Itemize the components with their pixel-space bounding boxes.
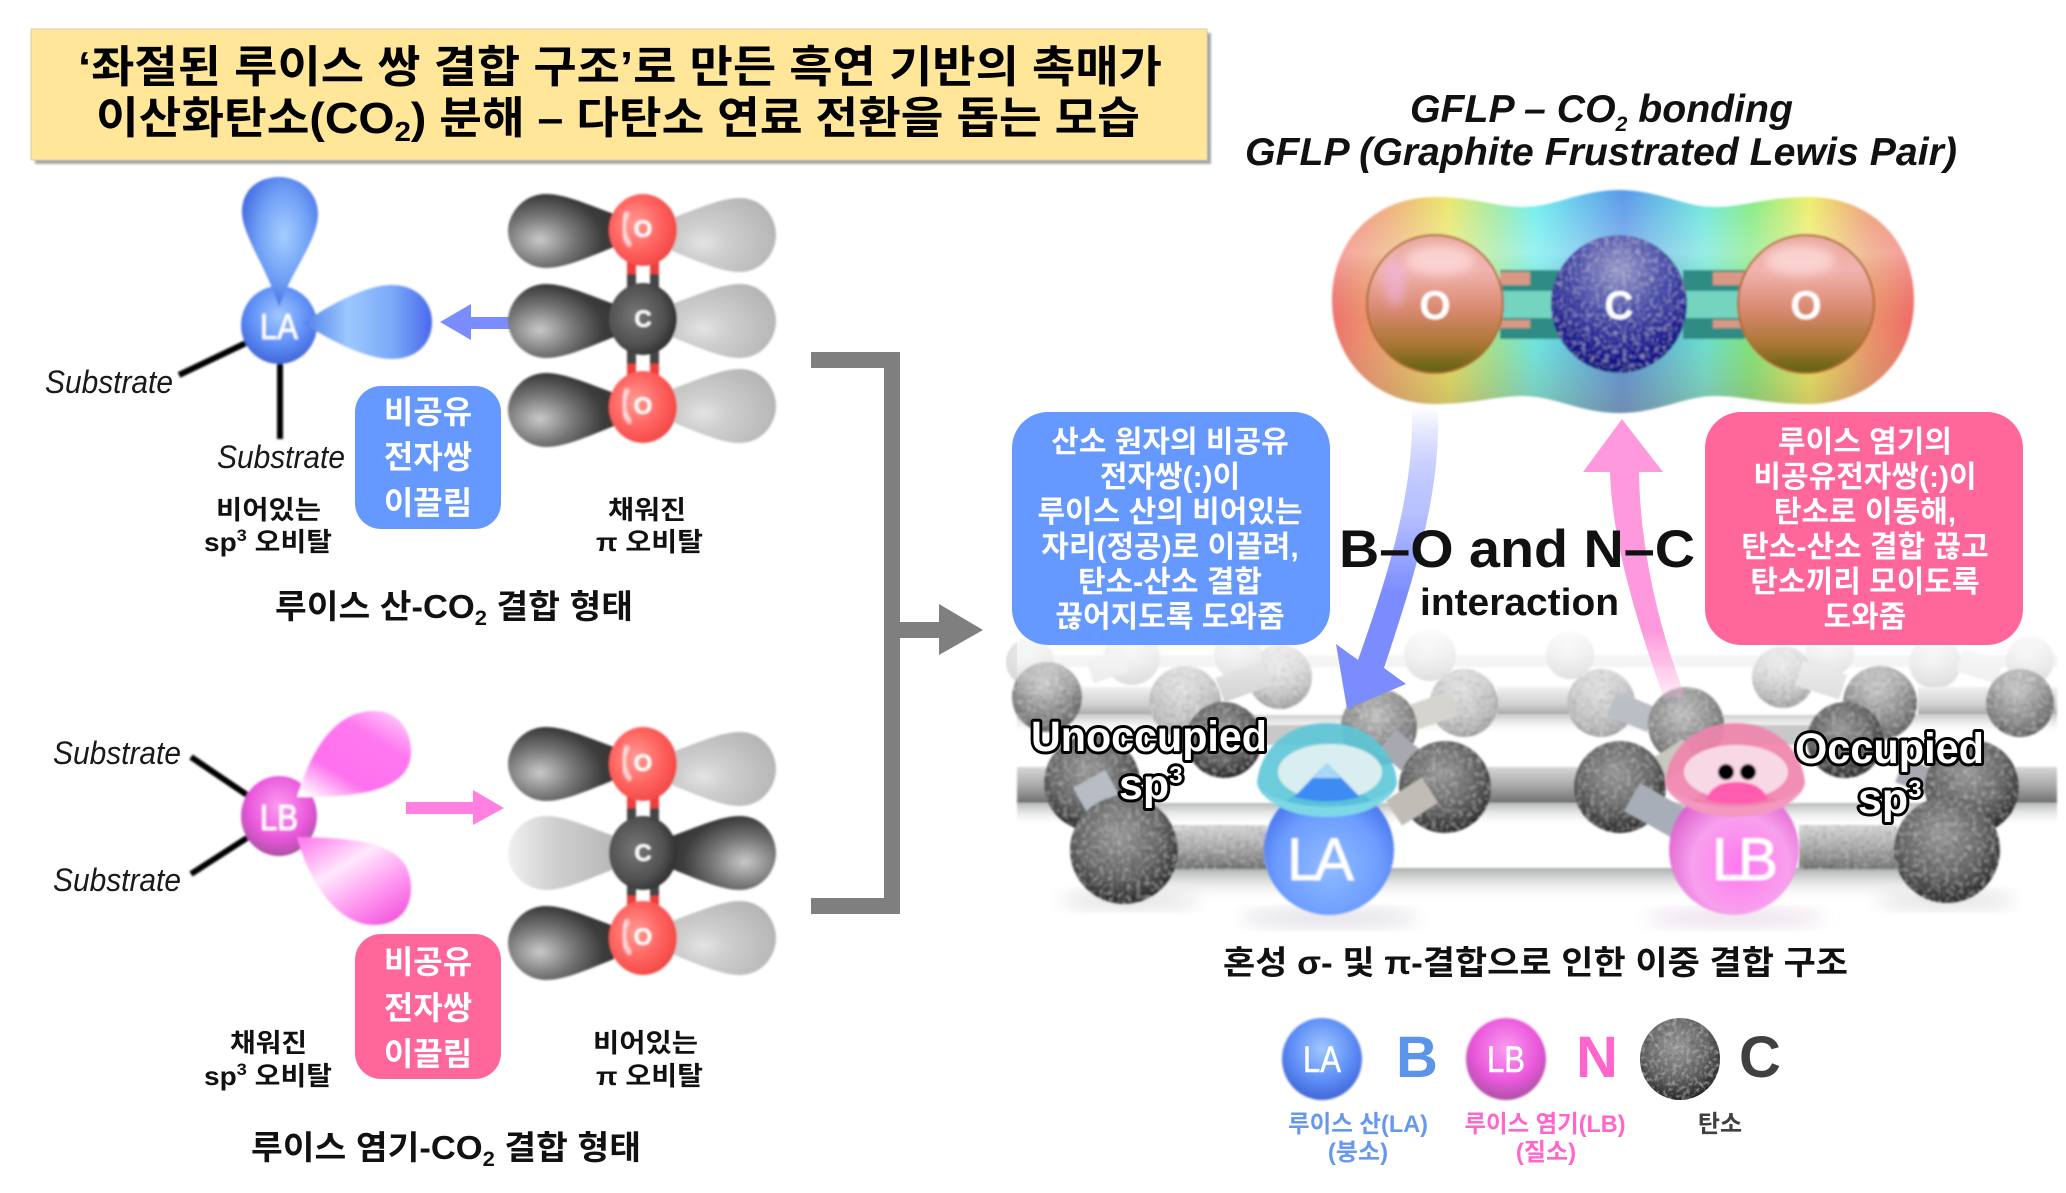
substrate label: Substrate — [45, 364, 173, 400]
arrow: N-C interaction — [1583, 419, 1686, 698]
rainbow surface — [1332, 190, 1914, 413]
double bonds — [627, 258, 659, 380]
atoms: O — [634, 216, 652, 243]
legend — [1282, 1018, 1781, 1166]
legend: boron: 루이스 산(LA) — [1288, 1111, 1428, 1138]
callout: oxygen lone pair (blue): 산소 원자의 비공유 — [1051, 426, 1289, 459]
LA label: LA — [260, 306, 298, 347]
arrow: B-O interaction — [1336, 410, 1438, 709]
legend: boron — [1282, 1018, 1438, 1166]
label: occupied sp3 — [1795, 725, 1984, 823]
atoms — [609, 194, 677, 443]
callout: oxygen lone pair (blue) — [1012, 412, 1330, 645]
upper lobe — [297, 711, 411, 797]
arrow: electron pair attraction to LA — [440, 304, 538, 340]
LB label: LB — [260, 797, 298, 838]
label: filled pi orbital: π 오비탈 — [596, 527, 703, 557]
label: empty sp3 orbital: sp — [204, 527, 234, 557]
callout: oxygen lone pair (blue): 루이스 산의 비어있는 — [1037, 496, 1303, 529]
heading: Lewis base-CO2 binding: 2 — [483, 1148, 495, 1171]
callout: Lewis base lone pair (pink): 탄소로 이동해, — [1774, 496, 1956, 529]
legend: boron: (붕소) — [1328, 1139, 1388, 1166]
substrate label: Substrate — [53, 862, 181, 898]
heading: Lewis acid-CO2 binding: 루이스 산-CO — [275, 588, 466, 625]
graphene lattice illustration — [1006, 625, 2057, 926]
callout: oxygen lone pair (blue): 전자쌍(:)이 — [1100, 461, 1240, 494]
callout: Lewis base lone pair (pink): 도와줌 — [1824, 601, 1906, 634]
label: empty sp3 orbital: 비어있는 — [216, 495, 321, 525]
title banner: ) 분해 – 다탄소 연료 전환을 돕는 모습 — [411, 94, 1140, 143]
label: empty sp3 orbital: 3 — [237, 526, 247, 545]
atoms: O — [634, 750, 652, 777]
label: empty sp3 orbital — [204, 495, 332, 557]
title banner: 이산화탄소(CO — [96, 94, 379, 143]
label: filled sp3 orbital: 오비탈 — [247, 1061, 332, 1091]
callout: oxygen lone pair (blue): 자리(정공)로 이끌려, — [1041, 531, 1299, 564]
callout: Lewis base lone pair (pink): 탄소-산소 결합 끊고 — [1741, 531, 1989, 564]
electron pair — [1718, 764, 1756, 780]
pill: lone-pair attraction (pink): 전자쌍 — [384, 990, 472, 1026]
callout: oxygen lone pair (blue): 탄소-산소 결합 — [1078, 566, 1262, 599]
diagram: Lewis base orbital — [191, 711, 411, 925]
dome shell — [1257, 723, 1397, 817]
label: empty sp3 orbital: 오비탈 — [247, 527, 332, 557]
label: unoccupied sp3: Unoccupied — [1031, 713, 1267, 761]
callout: Lewis base lone pair (pink): 비공유전자쌍(:)이 — [1753, 461, 1977, 494]
legend: nitrogen: 루이스 염기(LB) — [1464, 1111, 1626, 1138]
fade on the far rows — [1017, 625, 2057, 700]
right lobe — [303, 285, 432, 359]
pill: lone-pair attraction (blue) — [355, 386, 501, 529]
label: filled sp3 orbital: sp — [204, 1061, 234, 1091]
label: filled pi orbital — [596, 495, 703, 557]
label: occupied sp3: 3 — [1908, 776, 1922, 803]
diagram: Lewis acid orbital — [179, 177, 432, 439]
LA sphere — [241, 286, 317, 364]
atoms: C — [634, 306, 652, 333]
LA atom with empty dome: LA — [1287, 826, 1354, 893]
label: filled sp3 orbital: 3 — [237, 1060, 247, 1079]
double bonds — [627, 794, 659, 910]
substrate label: Substrate — [53, 735, 181, 771]
pill: lone-pair attraction (blue): 전자쌍 — [384, 439, 472, 475]
oxygen right — [1738, 235, 1874, 373]
oxygen left — [1367, 235, 1503, 373]
legend: carbon: 탄소 — [1698, 1111, 1742, 1138]
substrate label: Substrate — [217, 439, 345, 475]
label: filled pi orbital: 채워진 — [608, 495, 686, 525]
callout: Lewis base lone pair (pink): 루이스 염기의 — [1778, 426, 1952, 459]
substrate bonds — [179, 343, 280, 439]
label: B-O and N-C interaction: interaction — [1420, 582, 1619, 624]
heading: GFLP CO2 bonding — [1245, 88, 1957, 174]
caption: hybrid double bond structure: 혼성 σ- 및 π-결합으로 인한 이중 결합 구조 — [1223, 944, 1848, 981]
carbon: C — [1605, 284, 1633, 328]
label: unoccupied sp3: sp — [1119, 761, 1169, 809]
LA atom with empty dome — [1257, 723, 1397, 915]
legend: boron: LA — [1303, 1039, 1341, 1080]
atoms: O — [634, 924, 652, 951]
orbital lobes — [508, 194, 776, 447]
middle row — [1017, 687, 2057, 834]
atoms: C — [634, 840, 652, 867]
title banner: ‘좌절된 루이스 쌍 결합 구조’로 만든 흑연 기반의 촉매가 — [78, 43, 1162, 92]
legend: nitrogen: N — [1576, 1025, 1618, 1090]
heading: GFLP CO2 bonding: bonding — [1627, 88, 1793, 131]
legend: nitrogen — [1464, 1018, 1626, 1166]
label: empty pi orbital — [593, 1028, 703, 1091]
label: empty pi orbital: π 오비탈 — [596, 1061, 703, 1091]
label: occupied sp3: sp — [1858, 775, 1908, 823]
dome shell — [1665, 723, 1805, 817]
bracket and arrow — [811, 352, 983, 914]
heading: Lewis acid-CO2 binding: 2 — [475, 607, 487, 630]
legend: boron: B — [1396, 1025, 1438, 1090]
pill: lone-pair attraction (pink) — [355, 934, 501, 1079]
pill: lone-pair attraction (blue): 비공유 — [384, 394, 472, 430]
oxygen right: O — [1790, 284, 1822, 328]
heading: GFLP CO2 bonding: GFLP – CO — [1410, 88, 1614, 131]
top lobe — [242, 177, 318, 307]
LB sphere — [241, 776, 317, 856]
label: occupied sp3: Occupied — [1795, 725, 1984, 773]
oxygen left: O — [1419, 284, 1451, 328]
pill: lone-pair attraction (pink): 비공유 — [384, 944, 472, 980]
label: unoccupied sp3 — [1031, 713, 1267, 809]
heading: Lewis base-CO2 binding: 결합 형태 — [495, 1129, 641, 1166]
title banner — [31, 29, 1211, 164]
CO2 electrostatic surface — [1332, 190, 1914, 413]
orbital lobes — [508, 727, 776, 980]
far atoms and bonds — [1006, 628, 2057, 709]
pill: lone-pair attraction (blue): 이끌림 — [384, 485, 472, 521]
back row — [1012, 662, 2057, 740]
label: unoccupied sp3: 3 — [1169, 762, 1183, 789]
atoms — [609, 727, 677, 975]
legend: carbon: C — [1739, 1025, 1781, 1090]
bonds — [1500, 270, 1745, 339]
pill: lone-pair attraction (pink): 이끌림 — [384, 1036, 472, 1072]
CO2 molecule: upper — [508, 194, 776, 447]
LB atom with occupied dome — [1665, 723, 1805, 915]
label: empty pi orbital: 비어있는 — [593, 1028, 698, 1058]
legend: nitrogen: LB — [1487, 1039, 1525, 1080]
CO2 molecule: lower — [508, 727, 776, 980]
heading: GFLP CO2 bonding: 2 — [1615, 113, 1628, 136]
label: B-O and N-C interaction — [1339, 520, 1695, 624]
heading: Lewis base-CO2 binding: 루이스 염기-CO — [251, 1129, 472, 1166]
label: B-O and N-C interaction: B–O and N–C — [1339, 520, 1695, 579]
atoms: O — [634, 393, 652, 420]
legend: nitrogen: (질소) — [1516, 1139, 1576, 1166]
front row atoms and bonds — [1070, 796, 2000, 904]
lower lobe — [297, 837, 411, 925]
callout: Lewis base lone pair (pink): 탄소끼리 모이도록 — [1750, 566, 1980, 599]
legend: carbon — [1640, 1018, 1781, 1138]
substrate bonds — [191, 757, 250, 874]
arrow: electron pair donation to CO2 — [406, 790, 504, 825]
carbon — [1551, 235, 1687, 373]
callout: Lewis base lone pair (pink) — [1705, 412, 2023, 645]
heading: Lewis acid-CO2 binding: 결합 형태 — [487, 588, 633, 625]
LB atom with occupied dome: LB — [1712, 826, 1778, 893]
shadow bands — [1017, 715, 2057, 926]
title banner: 2 — [394, 116, 411, 147]
callout: oxygen lone pair (blue): 끊어지도록 도와줌 — [1055, 601, 1285, 634]
label: filled sp3 orbital — [204, 1028, 332, 1091]
heading: GFLP CO2 bonding: GFLP (Graphite Frustrated Lewis Pair) — [1245, 131, 1957, 174]
label: filled sp3 orbital: 채워진 — [230, 1028, 307, 1058]
